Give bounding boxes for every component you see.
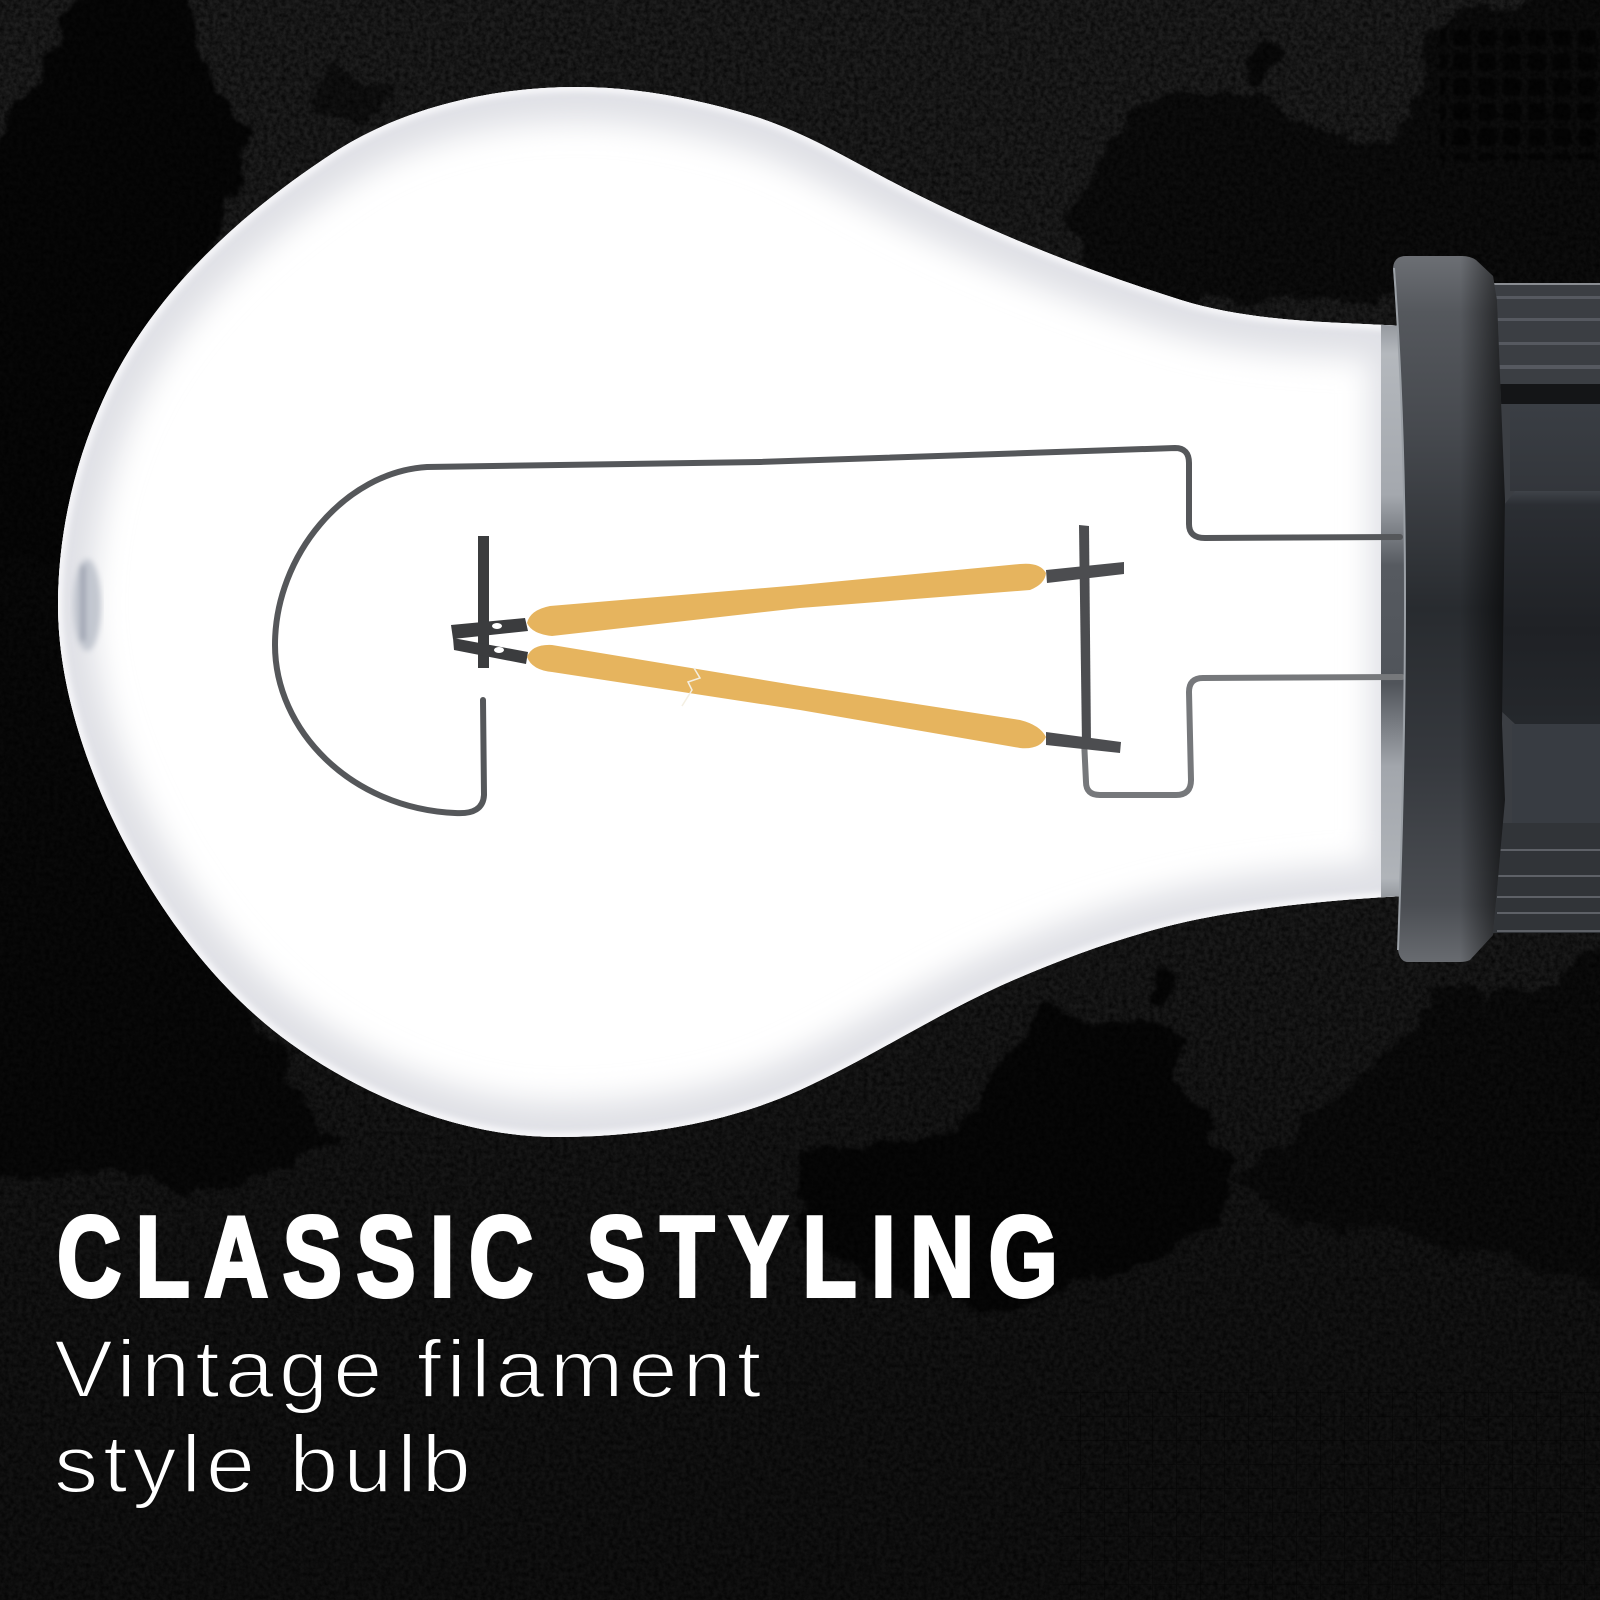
upper filament [527, 564, 1046, 636]
threaded cap body [1485, 283, 1600, 933]
mosaic grid texture, top right [1440, 30, 1600, 160]
ribs, top [1495, 296, 1600, 369]
upper panel [1510, 404, 1600, 491]
glass envelope [40, 70, 1420, 1150]
filament mounts [451, 525, 1124, 753]
lower panel [1512, 724, 1600, 823]
subtitle: Vintage filament [54, 1324, 762, 1415]
ribs, bottom [1497, 849, 1600, 932]
upper support wire [275, 448, 1400, 813]
lower filament [527, 645, 1046, 748]
black cap collar [1393, 256, 1505, 962]
title: CLASSIC STYLING: CLASSIC STYLING [57, 1192, 1058, 1321]
base-end glass smudge [73, 559, 101, 651]
centre panel [1500, 491, 1600, 724]
neck band where glass meets cap [1381, 324, 1404, 898]
stray fibre on lower filament [682, 668, 700, 706]
faint grid texture, bottom right [1060, 1390, 1600, 1600]
filaments [527, 564, 1046, 748]
subtitle: style bulb [54, 1419, 471, 1510]
lower support wire [1084, 677, 1402, 795]
light bulb [40, 70, 1600, 1150]
support wires [275, 448, 1402, 813]
subtitle [54, 1324, 762, 1510]
